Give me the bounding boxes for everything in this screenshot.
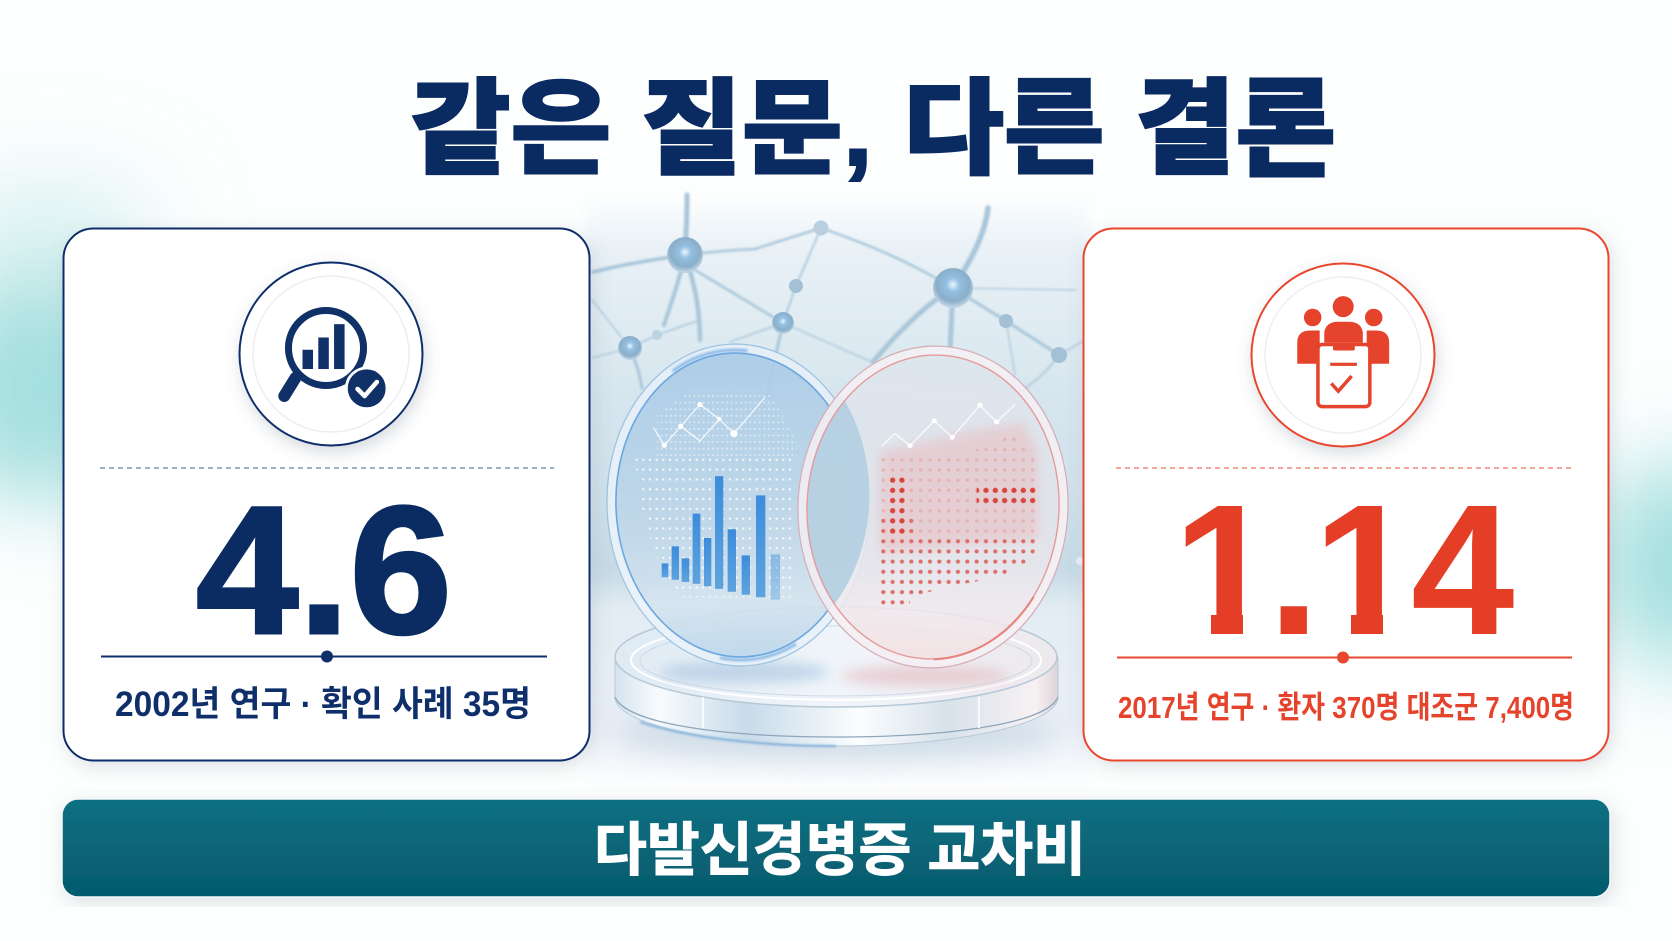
caption: 2002년 연구 · 확인 사례 35명 (115, 685, 531, 724)
icon badge: people with clipboard (1252, 264, 1434, 446)
line chart (882, 403, 1015, 448)
banner label: 다발신경병증 교차비 (594, 818, 1086, 883)
card (1084, 228, 1608, 760)
card (64, 228, 590, 760)
dot grid (879, 434, 1037, 535)
value: 1.14 (1173, 467, 1514, 674)
neuron network (592, 195, 1085, 565)
bars (662, 476, 780, 600)
blue glass disc with bar chart (599, 337, 877, 673)
line chart (653, 397, 765, 448)
panel: 2002 study (64, 228, 590, 760)
red glass disc with dot map (790, 339, 1076, 675)
rule marker (321, 650, 333, 662)
rule marker (1337, 652, 1349, 664)
panel: 2017 study (1084, 228, 1608, 760)
blue rim (599, 337, 877, 673)
central scene illustration (586, 190, 1088, 795)
glass platform (611, 607, 1061, 761)
red rim (790, 339, 1076, 675)
banner (62, 799, 1610, 897)
icon badge: magnifier with bar chart (240, 262, 422, 446)
overlap lens (808, 402, 870, 604)
caption: 2017년 연구 · 환자 370명 대조군 7,400명 (1118, 690, 1574, 725)
page background glow: left (0, 175, 160, 505)
dot field (635, 455, 793, 597)
title: 같은 질문, 다른 결론 (410, 72, 1336, 188)
page background glow: right (1595, 460, 1672, 670)
pink haze (880, 423, 1038, 554)
scene backdrop (586, 190, 1088, 795)
value: 4.6 (196, 468, 452, 672)
